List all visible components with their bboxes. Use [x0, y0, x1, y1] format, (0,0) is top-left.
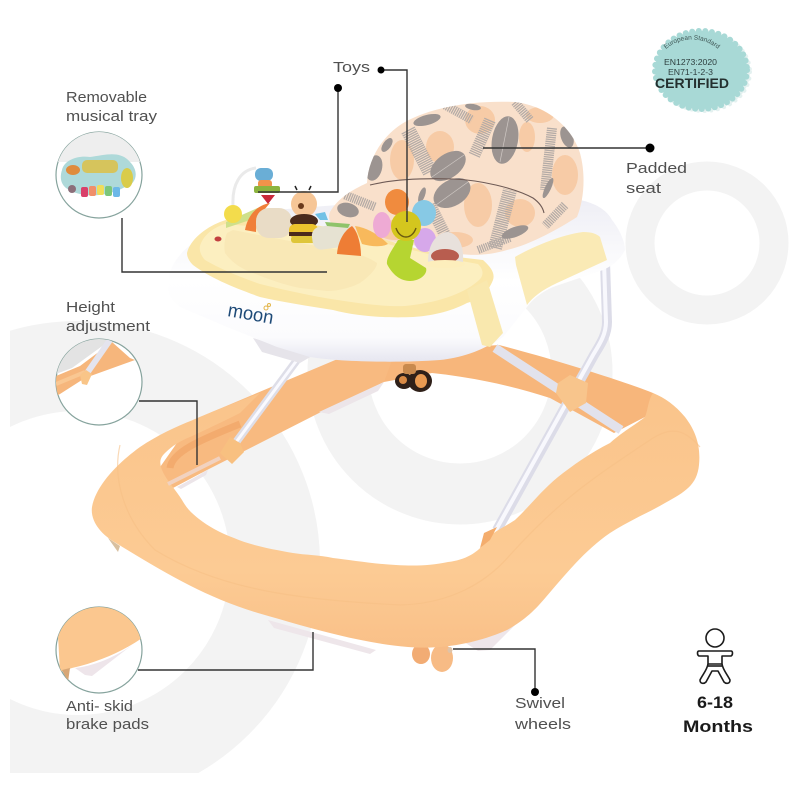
callout: padded seat: seat [626, 180, 662, 197]
rear right rail [384, 345, 662, 433]
callout: removable musical tray: musical tray [66, 108, 158, 125]
callout: height adjustment: adjustment [66, 318, 151, 335]
flower toy [373, 189, 436, 281]
certified badge: EN1273:2020 [664, 57, 717, 67]
walker white tray body [168, 200, 625, 362]
label: Anti- skid [66, 698, 133, 715]
rear left rail [158, 352, 405, 488]
ring crease [118, 431, 700, 605]
tray leader [258, 88, 338, 192]
rear brake pads [177, 382, 384, 489]
blue piece [315, 212, 328, 220]
tray inner rim [200, 224, 482, 306]
under tray mechanism [253, 338, 312, 363]
green bar [325, 222, 350, 228]
callout: height adjustment: Height [66, 299, 116, 316]
green bar behind [226, 206, 262, 228]
dot [646, 144, 654, 152]
lens: height [56, 339, 142, 425]
yellow tray surface [187, 215, 494, 317]
orange fin [337, 226, 361, 256]
lens: brake [56, 607, 142, 693]
dome toy [425, 232, 465, 268]
rattle left [256, 208, 292, 238]
orange arch [245, 203, 270, 232]
leader line [138, 632, 313, 670]
left leg tube [234, 360, 297, 445]
certified badge: CERTIFIED [655, 75, 729, 91]
label: Removable [66, 89, 147, 106]
right joint [556, 375, 588, 412]
wire arc with beads [233, 168, 256, 205]
leaf midribs [432, 117, 509, 205]
orange wedge [355, 226, 388, 246]
dot [531, 688, 539, 696]
callout: toys: Toys [333, 59, 370, 76]
yellow star left [224, 205, 242, 223]
callout: anti-skid brake pads [56, 600, 313, 733]
rattle right [311, 222, 355, 251]
under-ring pads and foot [108, 475, 685, 654]
callout: removable musical tray [56, 89, 327, 272]
red button [214, 236, 222, 242]
front wheels [412, 644, 453, 672]
certified badge [652, 28, 752, 113]
tray leader dot [334, 84, 342, 92]
age recommendation [683, 629, 753, 736]
front base ring [92, 393, 699, 648]
leader line [139, 401, 197, 465]
toys leader [381, 70, 407, 222]
peach leaves [377, 106, 578, 248]
seat seam [370, 179, 544, 213]
left joint [220, 437, 244, 464]
certified badge: European Standard [664, 35, 720, 49]
age text: 6-18 [697, 693, 733, 712]
label: Swivel [515, 695, 565, 712]
callout: height adjustment [56, 299, 197, 465]
fern fronds [345, 102, 580, 250]
callout: padded seat [483, 144, 687, 197]
height adjustment recess [168, 424, 240, 484]
right leg socket [480, 527, 497, 548]
lens: tray [56, 132, 142, 218]
label: Padded [626, 160, 687, 177]
right leg tube [496, 262, 607, 530]
bee toy [289, 186, 318, 243]
age recommendation: Months [683, 717, 753, 736]
leader line [122, 218, 327, 272]
tray inner pocket [224, 230, 377, 291]
icon: baby [698, 629, 732, 683]
background rings [0, 176, 774, 760]
callout: swivel wheels [453, 649, 571, 733]
callout: swivel wheels: wheels [514, 716, 571, 733]
grey leaves [336, 103, 576, 241]
toys leader dot [378, 66, 384, 74]
moon logo: moon [226, 300, 275, 329]
certified badge: EN71-1-2-3 [668, 68, 714, 77]
rear cross tube [495, 348, 621, 430]
callout: anti-skid brake pads: brake pads [66, 716, 149, 733]
rear swivel wheel [395, 364, 432, 392]
toys group [224, 168, 465, 281]
callout: toys [258, 59, 407, 222]
yellow side pad [515, 232, 607, 305]
baby walker product [92, 95, 700, 672]
yellow strap [467, 280, 503, 347]
seat pad [329, 102, 584, 255]
